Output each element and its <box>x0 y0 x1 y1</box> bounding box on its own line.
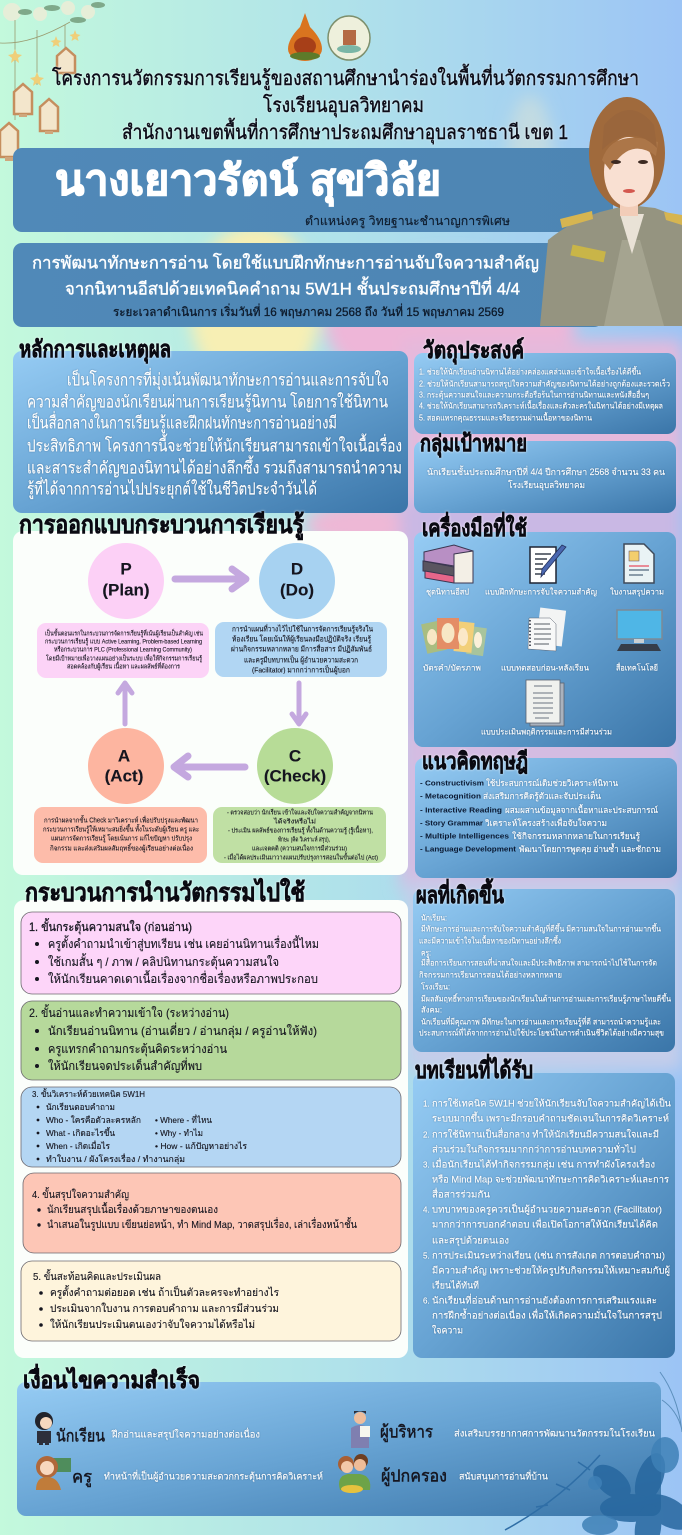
theory terms: - Interactive Reading <box>420 806 502 814</box>
panel: name banner <box>13 148 613 232</box>
act description <box>34 807 207 863</box>
lessons list: 6. <box>423 1296 430 1306</box>
step 3 box: What - เกิดอะไรขึ้น <box>46 1127 115 1138</box>
panel: outcomes <box>413 889 675 1052</box>
step 5 box: 5. ขั้นสะท้อนคิดและประเมินผล <box>33 1269 161 1283</box>
theory descriptions: วิเคราะห์โครงสร้างเพื่อจับใจความ <box>485 817 607 828</box>
lessons list: การใช้นิทานเป็นสื่อกลาง ทำให้นักเรียนมีความสนใจและมี <box>432 1128 659 1140</box>
lessons list: เมื่อนักเรียนได้ทำกิจกรรมกลุ่ม เช่น การทำผังโครงเรื่อง <box>432 1158 655 1170</box>
heading: success conditions: เงื่อนไขความสำเร็จ <box>23 1363 200 1393</box>
rationale text: ความสำคัญของนักเรียนผ่านการเรียนรู้นิทาน โดยการใช้นิทาน <box>27 392 388 412</box>
rationale text: และสาระสำคัญของนิทานได้อย่างลึกซึ้ง รวมถึงสามารถนำความ <box>27 456 402 478</box>
icon: teacher <box>36 1456 71 1490</box>
label: pre post tests: แบบทดสอบก่อน-หลังเรียน <box>501 664 590 672</box>
panel: objectives <box>414 353 676 434</box>
check description: - ตรวจสอบว่า นักเรียน เข้าใจและจับใจความสำคัญจากนิทาน <box>227 808 373 816</box>
lessons list: การฝึกซ้ำอย่างต่อเนื่อง เพื่อให้เกิดความมั่นใจในการสรุป <box>432 1308 662 1322</box>
logo: OBEC emblem <box>288 13 322 61</box>
theory descriptions: ผสมผสานข้อมูลจากเนื้อหาและประสบการณ์ <box>505 804 658 816</box>
lessons list: การประเมินระหว่างเรียน (เช่น การสังเกต การตอบคำถาม) <box>432 1250 665 1262</box>
top-left hanging lanterns and vine <box>0 1 105 161</box>
C circle: C <box>289 746 301 766</box>
act description: กระบวนการเรียนรู้ให้เหมาะสมยิ่งขึ้น ทั้งในระดับผู้เรียน ครู และ <box>43 822 199 834</box>
panel: implementation process <box>14 877 408 1358</box>
label: evaluation form: แบบประเมินพฤติกรรมและการมีส่วนร่วม <box>481 728 612 736</box>
P circle: (Plan) <box>102 580 150 600</box>
text: student role: ฝึกอ่านและสรุปใจความอย่างต่อเนื่อง <box>111 1428 260 1440</box>
lessons list: เรียนได้ทันที <box>432 1280 479 1292</box>
outcomes text: กิจกรรมการเรียนการสอนได้อย่างหลากหลาย <box>419 970 562 980</box>
theory descriptions: พัฒนาโดยการพูดคุย อ่านซ้ำ และซักถาม <box>519 843 661 855</box>
rationale text: ประสิทธิภาพ โครงการนี้จะช่วยให้นักเรียนสามารถเข้าใจเนื้อเรื่อง <box>27 434 402 456</box>
check description <box>213 807 386 863</box>
do description <box>215 622 387 677</box>
heading: implementation process: กระบวนการนำนวัตกรรมไปใช้ <box>25 877 305 907</box>
plan description: โดยมีเป้าหมายเพื่อวางแผนอย่างเป็นระบบ เพื่อให้กิจกรรมการเรียนรู้ <box>46 654 202 662</box>
do description: ผ่านกิจกรรมหลากหลาย มีการสื่อสาร มีปฏิสัมพันธ์ <box>231 644 372 654</box>
step 2 box: ให้นักเรียนจดประเด็นสำคัญที่พบ <box>48 1057 202 1073</box>
objectives list: 3. กระตุ้นความสนใจและความกระตือรือร้นในการอ่านนิทานและหนังสืออื่นๆ <box>419 388 649 400</box>
theory terms: - Metacognition <box>420 792 481 800</box>
step 3 box: • Where - ที่ไหน <box>155 1114 212 1125</box>
check description: - เมื่อได้ผลประเมินมาวางแผนปรับปรุงการสอนในขั้นต่อไป (Act) <box>224 852 378 862</box>
icon: worksheet <box>624 544 654 583</box>
act description: แผนการจัดการเรียนรู้ โดยเน้นการ แก้ไขปัญหา ปรับปรุง <box>51 834 192 842</box>
section: lessons learned <box>413 1053 675 1358</box>
text: parents role: สนับสนุนการอ่านที่บ้าน <box>459 1470 548 1482</box>
section: objectives <box>414 337 676 434</box>
rationale text: เป็นโครงการที่มุ่งเน้นพัฒนาทักษะการอ่านและการจับใจ <box>67 368 389 390</box>
target group text <box>427 465 665 491</box>
plan description: หรือกระบวนการ PLC (Professional Learning Community) <box>54 646 192 654</box>
outcomes text: และมีความเข้าใจในเนื้อหาของนิทานอย่างลึกซึ้ง <box>419 934 561 946</box>
check description: ทักษะ (คิด วิเคราะห์ สรุป), <box>278 836 330 844</box>
A circle: A <box>118 746 130 766</box>
panel: theory <box>415 758 677 878</box>
step 4 box: นำเสนอในรูปแบบ เขียนย่อหน้า, ทำ Mind Map, วาดสรุปเรื่อง, เล่าเรื่องหน้าชั้น <box>47 1217 357 1231</box>
step 4 box: 4. ขั้นสรุปใจความสำคัญ <box>32 1187 129 1201</box>
outcomes text <box>419 914 671 1038</box>
panel: lessons learned <box>413 1073 675 1358</box>
icon: flash cards <box>421 618 487 656</box>
theory descriptions: ส่งเสริมการคิดรู้ตัวและจับประเด็น <box>483 790 601 802</box>
objectives list: 1. ช่วยให้นักเรียนอ่านนิทานได้อย่างคล่องแคล่วและเข้าใจเนื้อเรื่องได้ดีขึ้น <box>419 366 641 376</box>
label: technology: สื่อเทคโนโลยี <box>616 662 658 672</box>
plan description <box>37 623 209 678</box>
project period: ระยะเวลาดำเนินการ เริ่มวันที่ 16 พฤษภาคม 2568 ถึง วันที่ 15 พฤษภาคม 2569 <box>113 303 504 319</box>
do description: (Facilitator) มากกว่าการเป็นผู้บอก <box>252 664 350 674</box>
theory descriptions: ใช้กิจกรรมหลากหลายในการเรียนรู้ <box>512 831 640 842</box>
step 1 box: 1. ขั้นกระตุ้นความสนใจ (ก่อนอ่าน) <box>29 918 192 935</box>
outcomes text: นักเรียน: <box>421 914 447 922</box>
lessons list: หรือ Mind Map จะช่วยพัฒนาทักษะการคิดวิเคราะห์และการ <box>432 1174 669 1186</box>
lessons list: 1. <box>423 1100 430 1108</box>
lessons list: บทบาทของครูควรเป็นผู้อำนวยความสะดวก (Facilitator) <box>432 1202 662 1216</box>
step 3 box: • How - แก้ปัญหาอย่างไร <box>155 1141 247 1151</box>
step 1 box <box>21 912 401 994</box>
outcomes text: มีสื่อการเรียนการสอนที่น่าสนใจและมีประสิทธิภาพ สามารถนำไปใช้ในการจัด <box>421 956 657 968</box>
title block: สำนักงานเขตพื้นที่การศึกษาประถมศึกษาอุบลราชธานี เขต 1 <box>122 118 568 145</box>
label: Aesop books: ชุดนิทานอีสป <box>426 588 469 596</box>
plan description: กระบวนการเรียนรู้ แบบ Active Learning, Problem-based Learning <box>45 638 202 646</box>
step 5 box: ครูตั้งคำถามต่อยอด เช่น ถ้าเป็นตัวละครจะทำอย่างไร <box>50 1285 279 1299</box>
D circle: (Do) <box>280 580 314 600</box>
step 3 box: ทำใบงาน / ผังโครงเรื่อง / ทำงานกลุ่ม <box>46 1153 185 1165</box>
objectives list: 5. สอดแทรกคุณธรรมและจริยธรรมผ่านเนื้อหาของนิทาน <box>419 412 592 422</box>
lessons list: ส่วนร่วมในกิจกรรมมากกว่าการอ่านบทความทั่วไป <box>432 1142 636 1156</box>
P circle: P <box>120 560 132 578</box>
step 3 box: • Why - ทำไม <box>155 1128 203 1138</box>
panel: rationale <box>13 351 408 513</box>
background flower art <box>190 95 682 1070</box>
target group text: นักเรียนชั้นประถมศึกษาปีที่ 4/4 ปีการศึกษา 2568 จำนวน 33 คน <box>427 465 665 477</box>
section: theory <box>415 748 677 878</box>
icon: parents <box>338 1454 370 1493</box>
theory descriptions: ใช้ประสบการณ์เดิมช่วยวิเคราะห์นิทาน <box>486 778 618 788</box>
theory terms: - Constructivism <box>420 778 484 788</box>
label: flash cards: บัตรคำ/บัตรภาพ <box>423 664 481 672</box>
icon: evaluation form <box>526 680 564 726</box>
step 5 box: ให้นักเรียนประเมินตนเองว่าจับใจความได้หรือไม่ <box>50 1318 255 1331</box>
label: parents: ผู้ปกครอง <box>381 1466 447 1486</box>
C circle <box>257 728 333 804</box>
outcomes text: โรงเรียน: <box>421 982 450 992</box>
lessons list: ใจความ <box>432 1324 463 1336</box>
section: rationale <box>13 336 408 513</box>
icon: exercise book and pen <box>530 545 566 583</box>
do description: และครูมีบทบาทเป็น ผู้อำนวยความสะดวก <box>244 654 358 664</box>
arrow: do to check <box>292 683 306 724</box>
title block: โรงเรียนอุบลวิทยาคม <box>263 94 424 118</box>
step 1 box: ให้นักเรียนคาดเดาเนื้อเรื่องจากชื่อเรื่องหรือภาพประกอบ <box>48 970 318 986</box>
panel: project title <box>13 243 603 327</box>
decoration: blue flowers <box>505 1372 682 1535</box>
heading: learning design: การออกแบบกระบวนการเรียนรู้ <box>19 511 304 541</box>
step 4 box: นักเรียนสรุปเนื้อเรื่องด้วยภาษาของตนเอง <box>47 1202 218 1216</box>
icon: student <box>35 1412 53 1445</box>
panel: target group <box>414 441 676 513</box>
lessons list: 4. <box>423 1206 430 1214</box>
check description: และเจตคติ (ความสนใจ/การมีส่วนร่วม) <box>252 844 347 852</box>
lessons list: มากกว่าการบอกคำตอบ เพื่อเปิดโอกาสให้นักเรียนได้คิด <box>432 1218 658 1230</box>
step 1 box: ครูตั้งคำถามนำเข้าสู่บทเรียน เช่น เคยอ่านนิทานเรื่องนี้ไหม <box>48 935 319 952</box>
C circle: (Check) <box>264 766 326 786</box>
A circle <box>88 728 164 804</box>
theory terms: - Story Grammar <box>420 818 483 828</box>
icon: pre post tests <box>528 608 566 651</box>
label: worksheet: ใบงานสรุปความ <box>610 588 664 596</box>
teacher name: นางเยาวรัตน์ สุขวิลัย <box>55 156 441 206</box>
step 1 box: ใช้เกมสั้น ๆ / ภาพ / คลิปนิทานกระตุ้นความสนใจ <box>48 953 279 970</box>
label: teacher: ครู <box>72 1468 92 1488</box>
lessons list: 2. <box>423 1130 430 1140</box>
step 3 box: When - เกิดเมื่อไร <box>46 1140 110 1151</box>
lessons list: และสรุปด้วยตนเอง <box>432 1236 509 1246</box>
heading: lessons learned: บทเรียนที่ได้รับ <box>415 1053 533 1083</box>
step 3 box: นักเรียนตอบคำถาม <box>46 1102 115 1112</box>
lessons list <box>423 1096 671 1336</box>
P circle <box>88 543 164 619</box>
rationale text: เป็นสื่อกลางในการเรียนรู้และฝึกฝนทักษะการอ่านอย่างมี <box>27 410 337 434</box>
step 4 box <box>23 1173 401 1253</box>
do description: ห้องเรียน โดยเน้นให้ผู้เรียนลงมือปฏิบัติจริง เรียนรู้ <box>232 634 371 644</box>
check description: ได้จริงหรือไม่ <box>273 818 316 826</box>
icon: Aesop books <box>423 545 473 583</box>
check description: - ประเมิน ผลลัพธ์ของการเรียนรู้ ทั้งในด้านความรู้ (รู้เนื้อหา), <box>228 826 373 834</box>
step 2 box <box>21 1001 401 1080</box>
lessons list: สื่อสารร่วมกัน <box>432 1188 491 1200</box>
do description: การนำแผนที่วางไว้ไปใช้ในการจัดการเรียนรู้จริงใน <box>232 624 373 634</box>
arrow: act to plan <box>118 683 132 724</box>
project title text <box>32 252 539 298</box>
section: target group <box>414 430 676 513</box>
step 3 box: 3. ขั้นวิเคราะห์ด้วยเทคนิค 5W1H <box>32 1088 145 1099</box>
target group text: โรงเรียนอุบลวิทยาคม <box>508 480 585 491</box>
D circle <box>259 543 335 619</box>
logo: school seal <box>328 16 370 60</box>
label: student: นักเรียน <box>56 1426 105 1446</box>
lessons list: มีความสำคัญ เพราะช่วยให้ครูปรับกิจกรรมให้เหมาะสมกับผู้ <box>432 1264 670 1276</box>
project title text: การพัฒนาทักษะการอ่าน โดยใช้แบบฝึกทักษะการอ่านจับใจความสำคัญ <box>32 252 539 272</box>
panel: PDCA learning design <box>13 511 408 875</box>
step 2 box: นักเรียนอ่านนิทาน (อ่านเดี่ยว / อ่านกลุ่ม / ครูอ่านให้ฟัง) <box>48 1022 317 1039</box>
rationale text: รู้ที่ได้จากการอ่านไปประยุกต์ใช้ในชีวิตประจำวันได้ <box>27 476 317 500</box>
lessons list: การใช้เทคนิค 5W1H ช่วยให้นักเรียนจับใจความสำคัญได้เป็น <box>432 1096 671 1110</box>
section: tools <box>414 511 676 747</box>
heading: target group: กลุ่มเป้าหมาย <box>420 430 527 458</box>
teacher portrait <box>540 97 682 326</box>
panel: tools <box>414 532 676 747</box>
step 3 box <box>21 1087 401 1167</box>
panel: success conditions <box>17 1382 661 1516</box>
step 2 box: 2. ขั้นอ่านและทำความเข้าใจ (ระหว่างอ่าน) <box>29 1004 229 1020</box>
lessons list: 5. <box>423 1252 430 1260</box>
theory terms: - Language Development <box>420 844 517 854</box>
outcomes text: ครู: <box>421 948 431 958</box>
text: administrator role: ส่งเสริมบรรยากาศการพัฒนานวัตกรรมในโรงเรียน <box>454 1428 655 1440</box>
project title text: จากนิทานอีสปด้วยเทคนิคคำถาม 5W1H ชั้นประถมศึกษาปีที่ 4/4 <box>65 276 520 298</box>
theory terms: - Multiple Intelligences <box>420 832 509 840</box>
label: exercise book: แบบฝึกทักษะการจับใจความสำคัญ <box>485 588 597 596</box>
section: outcomes <box>413 878 675 1052</box>
lessons list: ระบบมากขึ้น เพราะมีกรอบคำถามชัดเจนในการคิดวิเคราะห์ <box>432 1112 669 1124</box>
step 5 box <box>21 1261 401 1341</box>
icon: administrator <box>351 1411 370 1448</box>
heading: theory: แนวคิดทฤษฎี <box>422 748 528 774</box>
theory descriptions <box>483 778 661 855</box>
heading: tools: เครื่องมือที่ใช้ <box>422 511 527 541</box>
plan description: เป็นขั้นตอนแรกในกระบวนการจัดการเรียนรู้ที่เน้นผู้เรียนเป็นสำคัญ เช่น <box>45 628 203 638</box>
step 2 box: ครูแทรกคำถามกระตุ้นคิดระหว่างอ่าน <box>48 1042 227 1057</box>
arrow: plan to do <box>175 569 246 589</box>
act description: การนำผลจากขั้น Check มาวิเคราะห์ เพื่อปรับปรุงและพัฒนา <box>44 814 198 824</box>
outcomes text: สังคม: <box>421 1006 442 1014</box>
title block <box>52 64 639 145</box>
heading: outcomes: ผลที่เกิดขึ้น <box>416 878 504 908</box>
step 3 box: Who - ใครคือตัวละครหลัก <box>46 1115 141 1125</box>
A circle: (Act) <box>105 766 143 786</box>
icon: computer <box>617 610 662 651</box>
heading: objectives: วัตถุประสงค์ <box>423 337 524 365</box>
arrow: check to act <box>174 756 245 777</box>
lessons list: 3. <box>423 1160 430 1170</box>
heading: rationale: หลักการและเหตุผล <box>19 336 171 364</box>
teacher position: ตำแหน่งครู วิทยฐานะชำนาญการพิเศษ <box>305 214 510 229</box>
step 5 box: ประเมินจากใบงาน การตอบคำถาม และการมีส่วนร่วม <box>50 1302 279 1315</box>
D circle: D <box>291 560 303 578</box>
section: success conditions <box>17 1363 682 1535</box>
label: administrator: ผู้บริหาร <box>380 1422 433 1442</box>
text: teacher role: ทำหน้าที่เป็นผู้อำนวยความสะดวกกระตุ้นการคิดวิเคราะห์ <box>104 1470 323 1482</box>
act description: กิจกรรม และส่งเสริมผลสัมฤทธิ์ของผู้เรียนอย่างต่อเนื่อง <box>50 842 193 852</box>
rationale text <box>27 368 402 500</box>
plan description: สอดคล้องกับผู้เรียน เนื้อหา และผลลัพธ์ที่ต้องการ <box>67 662 180 670</box>
objectives list <box>419 366 670 422</box>
lessons list: นักเรียนที่อ่อนด้านการอ่านยังต้องการการเสริมแรงและ <box>432 1294 657 1306</box>
theory terms <box>420 778 517 854</box>
